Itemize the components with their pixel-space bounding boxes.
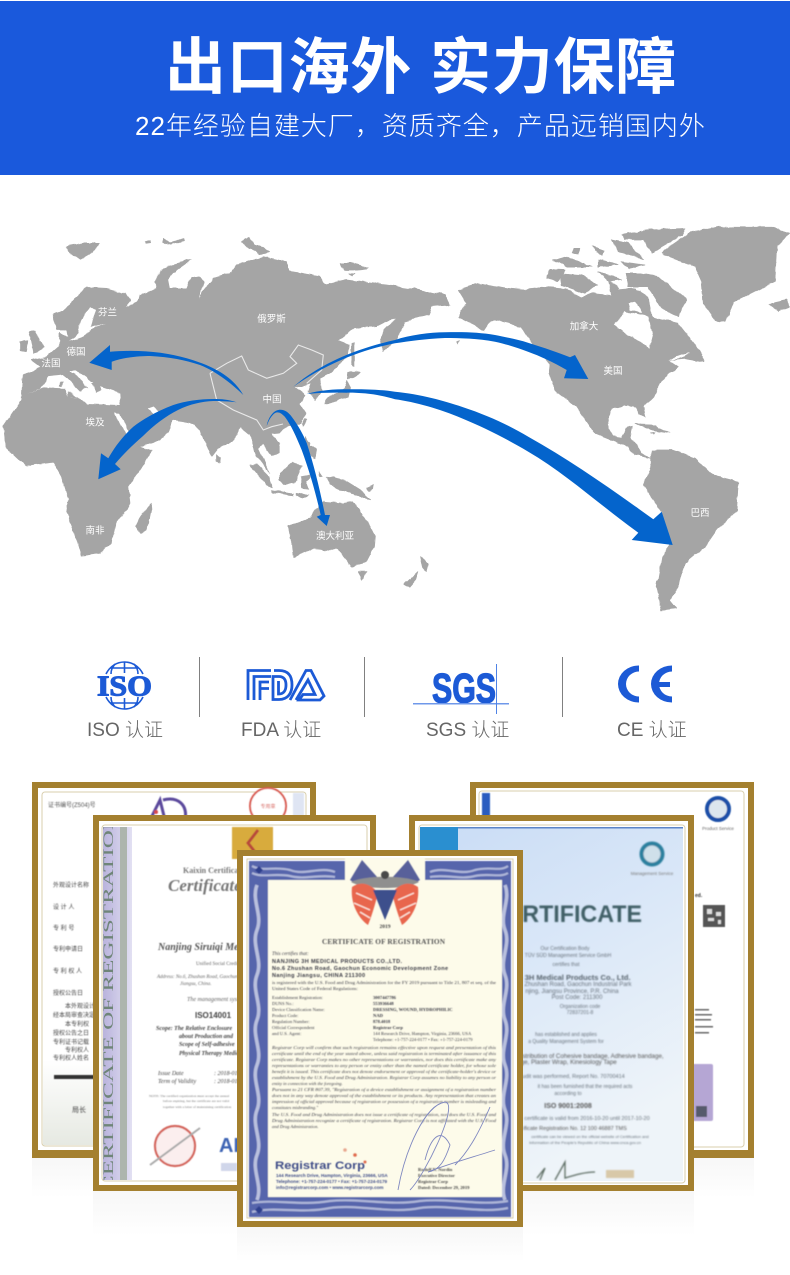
certificate body text: Drug Administration recognize a certificate of registration. Registrar Corp is not affiliated with the U.S. Food [271,1118,497,1123]
certificate: TUV ISO 9001: Information of the People's Republic of China www.cnca.gov.cn [529,1140,641,1145]
certificate: Kaixin ISO14001: Unified Social Credit [196,962,239,967]
map: China southwest border [210,373,283,430]
country labels [41,306,710,542]
certificate: TUV ISO 9001: Our Certification Body [541,946,590,952]
certificate body text: representations or warranties to any person or entity other than the named certificate holder, for whose sole [272,1063,496,1069]
certificate body text: Rudolf N. Nordin [418,1167,453,1172]
certificate: TUV product, back right: Product Service [702,826,734,831]
certificate body text: constitutes misbranding." [272,1105,318,1110]
certificate body text: 878.4018 [373,1019,391,1024]
certificate: TUV ISO 9001: Organization code [560,1004,601,1010]
certificate body text: info@registrarcorp.com • www.registrarcorp.com [276,1185,384,1190]
country labels: 法国 [41,358,61,370]
certificate: TUV product, back right: ed. [695,893,703,899]
certificate body text: entity in connection with the foregoing. [272,1081,343,1086]
certificate body text: and Drug Administration. [272,1124,319,1129]
certificate: Kaixin ISO14001: Term of Validity [158,1078,196,1085]
certificate body text: Device Classification Name: [272,1007,325,1012]
certificate body text: DRESSING, WOUND, HYDROPHILIC [373,1007,453,1012]
certificate body text: certificate until the end of the year stated above, unless said registration is terminated after issuance of this [272,1051,496,1057]
certificate body text: is registered with the U.S. Food and Drug Administration for the FY 2019 pursuant to Title 21, 807 et seq. of the [272,980,496,986]
certificate: Kaixin ISO14001: Nanjing Siruiqi Medical [157,942,259,953]
certificate body text: Registrar Corp [275,1160,365,1172]
certificate body text: 3007447786 [373,995,397,1000]
certificate body text: Nanjing Jiangsu, CHINA 211300 [272,973,365,979]
divider [562,657,563,717]
certificate body text: establishment by the U.S. Food and Drug Administration. Registrar Corp assumes no liability to any person or [272,1075,496,1080]
signature [398,1102,495,1190]
certificate: Chinese licence, back left: 专利权人 [65,1046,89,1054]
logo: ISO: ISO [97,672,152,702]
certificate: Chinese licence, back left: 专用章 [260,803,276,810]
certificate: Chinese licence, back left: 本专利权 [65,1020,89,1028]
country labels: 芬兰 [98,306,117,318]
certificate body text: and U.S. Agent: [272,1031,301,1036]
label: SGS: SGS 认证 [426,720,509,741]
certificate: Kaixin ISO14001 [93,812,376,1192]
certificate: TUV ISO 9001: audit was performed, Report No. 70700414 [519,1074,625,1080]
arrow to Brazil [307,389,673,545]
arrow to USA [293,332,588,387]
certificate body text: Dated: December 29, 2019 [418,1185,470,1190]
certificate: TUV ISO 9001: certifies that [553,962,580,968]
certificate: Kaixin ISO14001: Certificate [168,876,242,895]
certificate reflections [32,1158,754,1262]
certificate body text: This certifies that: [272,952,309,957]
certificate: TUV ISO 9001: ISO 9001:2008 [544,1103,592,1110]
certificate: Chinese licence, back left: 专 利 号 [53,924,74,932]
certificate: Chinese licence, back left: 设 计 人 [53,903,74,911]
country labels: 澳大利亚 [316,530,354,542]
certificate: TUV ISO 9001 [409,815,694,1191]
logo: CE [618,666,672,702]
certificate body text: Product Code: [272,1013,298,1018]
certificate: TUV ISO 9001: it has been furnished that the required acts [538,1084,633,1090]
certificate: Chinese licence, back left: 经本局审查决定 [53,1011,95,1019]
certificate body text: NAD [373,1013,384,1018]
emblem: 2019 [380,924,391,930]
title: 出口海外 实力保障 [165,33,677,101]
certificate body text: CERTIFICATE OF REGISTRATION [322,937,446,946]
divider [199,657,200,717]
divider [364,657,365,717]
certificate body text: Pursuant to 21 CFR 807.39, "Registration of a device establishment or assignment of a registration number [271,1087,496,1093]
certificate: Chinese licence, back left: 专利权人姓名 [53,1054,89,1062]
certificate body text: United States Code of Federal Regulations: [272,986,358,991]
seas cut from land [27,306,164,444]
certificate: TUV ISO 9001: Post Code: 211300 [552,995,603,1001]
certificate: TUV ISO 9001: certificate can be viewed on the official website of Certification and [531,1134,649,1139]
map: Europe Asia Africa [3,237,450,579]
certificate: TUV ISO 9001: TÜV SÜD Management Service GmbH [525,952,612,959]
certificate: Kaixin ISO14001: before expiring, but the certificate are not valid [163,1099,229,1104]
certificate body text: Registrar Corp will confirm that such registration remains effective upon request and presentation of this [271,1045,496,1050]
certificate body text: NANJING 3H MEDICAL PRODUCTS CO.,LTD. [272,959,402,965]
certificate body text: The U.S. Food and Drug Administration does not issue a certificate of registration, nor does the U.S. Food and [272,1112,497,1118]
certificate: Kaixin ISO14001: The management system [187,997,246,1003]
arrow to Africa [98,399,237,479]
certificate: Chinese licence, back left: 专 利 权 人 [53,967,82,975]
certificate: Kaixin ISO14001: Scope of Self-adhesive [179,1042,235,1048]
certificate body text: Establishment Registration: [272,995,323,1000]
certificate body text: DUNS No.: [272,1001,294,1006]
certificate: Chinese licence, back left: 授权公告日 [53,989,83,997]
certificate: TUV ISO 9001: ng 3H Medical Products Co., Ltd. [513,973,631,982]
certificate body text: 553936648 [373,1001,394,1006]
certificate body text: Registrar Corp [373,1025,403,1030]
certificate body text: Telephone: +1-757-224-0177 • Fax: +1-757-224-0179 [276,1179,388,1184]
certificate body text [271,937,497,1190]
certificate body text: Registrar Corp [418,1179,448,1184]
country labels: 中国 [262,394,282,406]
certificate: TUV ISO 9001: Zhushan Road, Gaochun Industrial Park [524,982,633,988]
country labels: 俄罗斯 [257,313,286,325]
certificate: TUV ISO 9001: certificate is valid from 2016-10-20 until 2017-10-20 [524,1116,650,1122]
logo: FDA [246,669,326,702]
certificate body text: No.6 Zhushan Road, Gaochun Economic Development Zone [272,966,448,972]
certificate: FDA registration, front [237,850,523,1227]
arrow to Germany [89,345,243,395]
certificate: Kaixin ISO14001: : 2018-01 [214,1079,238,1085]
country labels: 南非 [85,524,105,536]
certificate: Kaixin ISO14001: CERTIFICATE OF REGISTRATION [101,812,117,1192]
certificate: Kaixin ISO14001: Physical Therapy Medical [179,1051,244,1057]
certificate: Kaixin ISO14001: Issue Date [157,1071,184,1077]
certificate body text: Telephone: +1-757-224-0177 • Fax: +1-757-224-0179 [373,1037,473,1042]
certificate: Kaixin ISO14001: about Production and [179,1034,234,1040]
country labels: 埃及 [85,416,105,428]
certificate body text: does not in any way denote approval of the establishment or its products. Any representation that creates an [272,1093,497,1098]
certificate: TUV ISO 9001: CERTIFICATE [490,901,642,928]
certificate: TUV ISO 9001: Distribution of Cohesive bandage, Adhesive bandage, [516,1053,664,1060]
country labels: 德国 [66,346,86,358]
map: Italy and Greece [59,370,102,398]
certificate body text: impression of official approval because of registration or possession of a registration number is misleading and [272,1099,497,1104]
map: North America Greenland South America [404,227,790,610]
label: FDA: FDA 认证 [241,720,321,741]
logo: ISO [97,661,152,710]
subtitle: 22年经验自建大厂，资质齐全，产品远销国内外 [135,111,706,141]
certificate: Chinese licence, back left: 专利申请日 [53,945,83,953]
certificate: Kaixin ISO14001: Address: No.6, Zhushan Road, Gaochun [156,975,238,980]
header banner [0,1,790,175]
certificate: TUV ISO 9001: according to [554,1091,582,1097]
certificate body text: certificate. Registrar Corp makes no other representations or warranties, nor does this certificate make any [272,1057,496,1063]
blue guilloche border [249,858,511,1217]
country labels: 巴西 [690,508,710,519]
certificate: Chinese licence, back left: 本外观设计 [65,1002,95,1010]
certificate body text: Executive Director [418,1173,455,1178]
certificate body text: Regulation Number: [272,1019,310,1024]
certificate: Kaixin ISO14001: Kaixin Certification [183,866,252,875]
certificate body text: Official Correspondent [272,1025,315,1030]
certificate: Chinese licence, back left [32,782,316,1158]
certificates group [32,782,754,1227]
certificate: Chinese licence, back left: 局长 [72,1105,86,1114]
certificate: Chinese licence, back left: 专利证书记载 [53,1038,89,1046]
certificate: Kaixin ISO14001: ISO14001 [195,1011,232,1020]
certificate: TUV ISO 9001: 72837201-8 [567,1010,594,1016]
certificate body text: benefit it is issued. This certificate does not denote endorsement or approval of the certificate-holder's device or [272,1069,496,1074]
certificate body text: 144 Research Drive, Hampton, Virginia, 23666, USA [373,1031,472,1037]
certificate: Chinese licence, back left: 证书编号(Z504)号 [48,801,96,809]
certificate body text: 144 Research Drive, Hampton, Virginia, 23666, USA [276,1173,388,1178]
certificate: TUV ISO 9001: has established and applies [535,1032,597,1038]
certificate: Kaixin ISO14001: together with a letter of maintaining certification [163,1105,231,1109]
world map with export arrows [2,226,790,612]
certificate: TUV ISO 9001: Management Service [631,871,674,876]
certificate: TUV ISO 9001: age, Plaster Wrap, Kinesiology Tape [517,1059,617,1066]
certificate: TUV ISO 9001: ificate Registration No. 12 100 46887 TMS [523,1126,627,1132]
label: ISO: ISO 认证 [87,720,163,741]
certificate: Chinese licence, back left: 授权公告之日 [53,1029,89,1037]
label: CE: CE 认证 [617,720,687,741]
certificate: Kaixin ISO14001: AI [219,1135,239,1157]
certificate: Kaixin ISO14001: Scope: The Relative Enclosure [156,1026,232,1032]
land masses [3,227,790,610]
country labels: 加拿大 [570,320,599,332]
certificate: Chinese licence, back left: 外观设计名称 [53,881,89,889]
certificate: Kaixin ISO14001: NOTE: The certified organization must accept the annual [149,1094,229,1098]
map: China north border [210,345,323,383]
certificate: TUV ISO 9001: a Quality Management System for [528,1039,604,1045]
certificate: Kaixin ISO14001: : 2018-01 [214,1071,238,1077]
certificate: TUV ISO 9001: njing, Jiangsu Province, P.R. China [525,989,619,995]
certificate: TUV product, back right [470,782,754,1158]
country labels: 美国 [603,365,623,377]
certificate: Kaixin ISO14001: Jiangsu, China. [180,982,212,987]
seas and bays of North America [570,302,690,422]
emblem [350,860,420,930]
arrow to Australia [267,410,330,526]
